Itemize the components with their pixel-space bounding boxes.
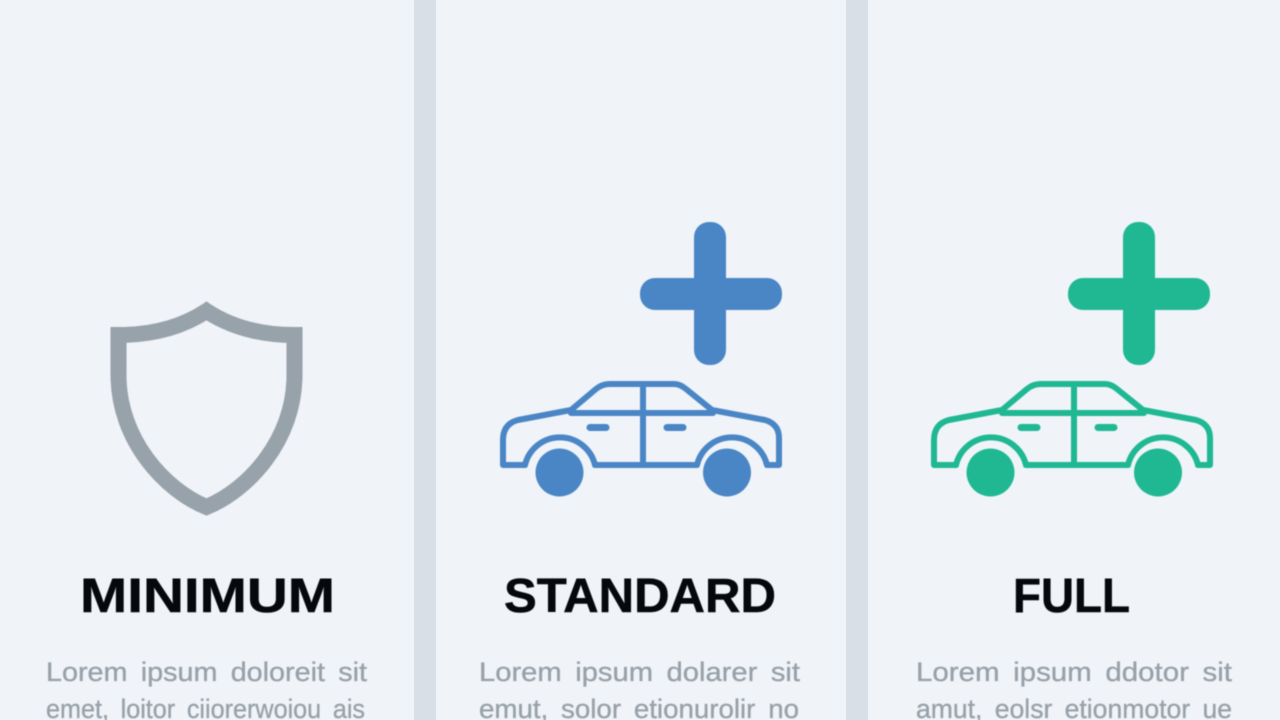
icon: green car xyxy=(934,384,1210,496)
heading: full: FULL xyxy=(1013,570,1130,623)
heading: standard: STANDARD xyxy=(504,570,776,623)
icon: blue plus xyxy=(640,222,782,365)
text block: full description: Lorem ipsum ddotor sit xyxy=(916,657,1233,687)
text block: minimum description: Lorem ipsum doloreit sit xyxy=(46,657,368,687)
panel: standard xyxy=(436,0,846,720)
text block: minimum description xyxy=(46,657,368,720)
icon: grey shield xyxy=(118,311,294,507)
heading: minimum: MINIMUM xyxy=(80,570,335,623)
text block: full description xyxy=(916,657,1233,720)
icon: green plus xyxy=(1068,222,1210,365)
text block: standard description: Lorem ipsum dolarer sit xyxy=(479,657,801,687)
text block: standard description xyxy=(479,657,801,720)
panel: full xyxy=(868,0,1280,720)
icon: blue car xyxy=(503,384,779,496)
panel: minimum xyxy=(0,0,414,720)
